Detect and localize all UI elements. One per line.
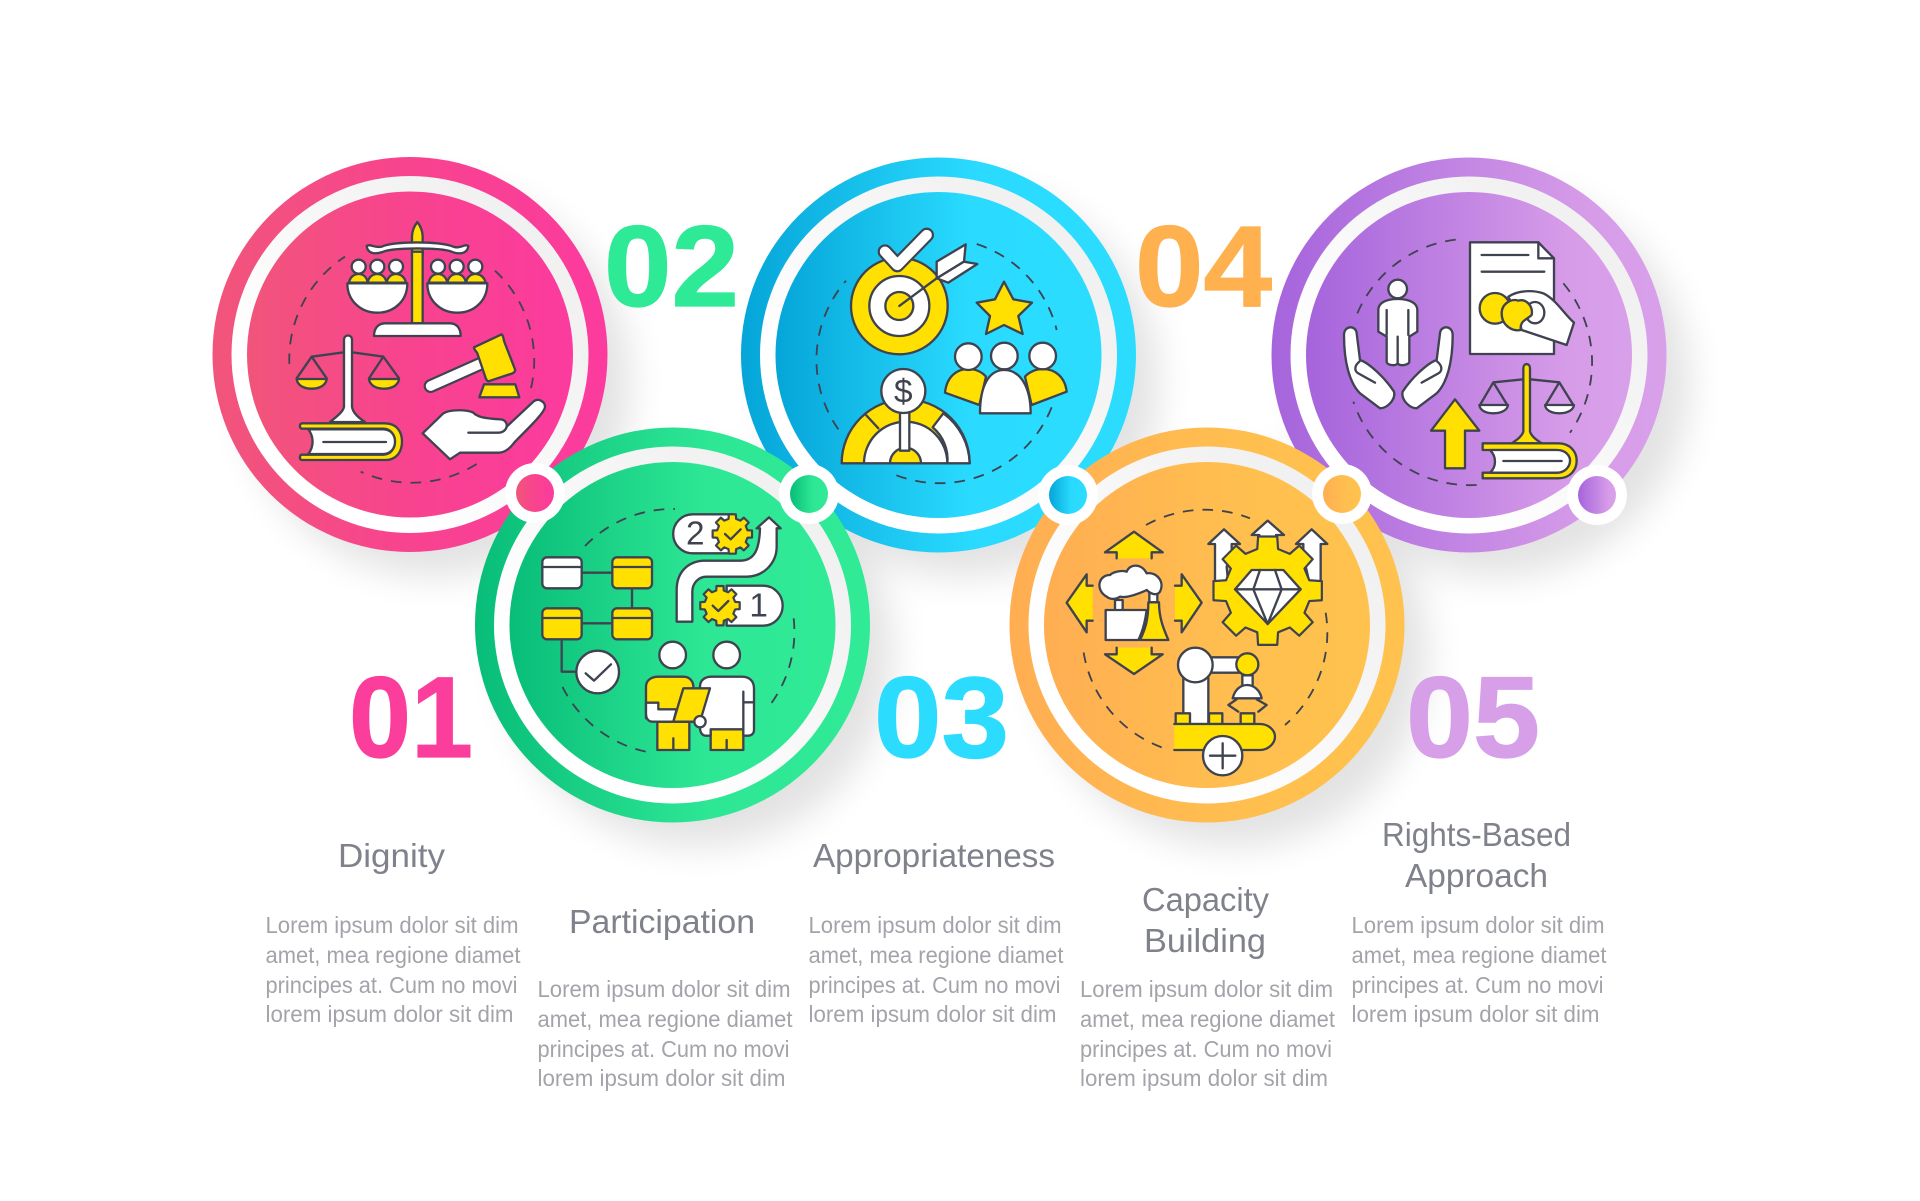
text block: Appropriateness description: amet, mea regione diamet [808,942,1064,968]
text block: Participation description: principes at. Cum no movi [538,1036,790,1062]
text block: Rights-Based Approach description: principes at. Cum no movi [1352,972,1604,998]
heading: Capacity Building: Building [1144,922,1266,959]
text block: Dignity description: Lorem ipsum dolor sit dim [266,912,518,938]
heading: Rights-Based Approach [1382,816,1571,894]
number 05: 05 [1406,654,1540,782]
text block: Rights-Based Approach description: amet, mea regione diamet [1352,942,1607,968]
number 02: 02 [604,203,739,331]
text block: Rights-Based Approach description [1352,912,1607,1027]
text block: Capacity Building description [1080,976,1336,1091]
text block: Appropriateness description: principes at. Cum no movi [808,972,1060,998]
text block: Dignity description: principes at. Cum no movi [266,972,518,998]
icon: capacity building [1067,510,1327,775]
heading: Rights-Based Approach: Rights-Based [1382,816,1571,853]
panel: circle 1 dignity [212,157,608,552]
connector dot 2 [779,464,839,524]
number 03: 03 [874,654,1009,782]
text block: Participation description [538,976,793,1091]
icon: participation workflow [542,509,794,752]
drop shadows [241,187,1690,847]
icon: target people gauge [816,235,1067,483]
heading: Dignity: Dignity [338,837,446,874]
connector dot 5 [1567,465,1627,525]
text block: Dignity description: amet, mea regione diamet [266,942,521,968]
panel: circle 5 rights-based approach [1272,158,1666,552]
text block: Participation description: lorem ipsum dolor sit dim [538,1065,786,1091]
heading: Rights-Based Approach: Approach [1405,857,1548,894]
text block: Participation description: Lorem ipsum dolor sit dim [538,976,790,1002]
heading: Appropriateness: Appropriateness [813,837,1055,874]
text block: Rights-Based Approach description: Lorem ipsum dolor sit dim [1352,912,1604,938]
icon: dignity justice [289,222,545,483]
text block: Appropriateness description: Lorem ipsum dolor sit dim [808,912,1062,938]
text block: Dignity description: lorem ipsum dolor sit dim [266,1001,514,1027]
number 01: 01 [349,654,473,782]
panel: circle 2 participation [475,428,870,822]
icon: person rights document [1344,239,1592,485]
icon: target people gauge: $ [894,374,913,411]
text block: Capacity Building description: principes at. Cum no movi [1080,1036,1332,1062]
text block: Capacity Building description: Lorem ipsum dolor sit dim [1080,976,1333,1002]
heading: Capacity Building [1142,881,1269,959]
text block: Dignity description [266,912,521,1027]
heading: Participation: Participation [569,903,755,940]
text block: Capacity Building description: amet, mea regione diamet [1080,1006,1336,1032]
connector dot 1 [505,463,565,523]
text block: Rights-Based Approach description: lorem ipsum dolor sit dim [1352,1001,1600,1027]
text block: Capacity Building description: lorem ipsum dolor sit dim [1080,1065,1328,1091]
text block: Appropriateness description: lorem ipsum dolor sit dim [808,1001,1056,1027]
panel: circle 4 capacity building [1010,428,1404,822]
heading: Capacity Building: Capacity [1142,881,1269,918]
connector dot 3 [1038,465,1098,525]
text block: Participation description: amet, mea regione diamet [538,1006,793,1032]
icon: participation workflow: 2 [686,515,705,552]
icon: participation workflow: 1 [749,588,768,625]
text block: Appropriateness description [808,912,1064,1027]
number 04: 04 [1135,203,1272,331]
panel: circle 3 appropriateness [741,158,1136,552]
connector dot 4 [1312,464,1372,524]
